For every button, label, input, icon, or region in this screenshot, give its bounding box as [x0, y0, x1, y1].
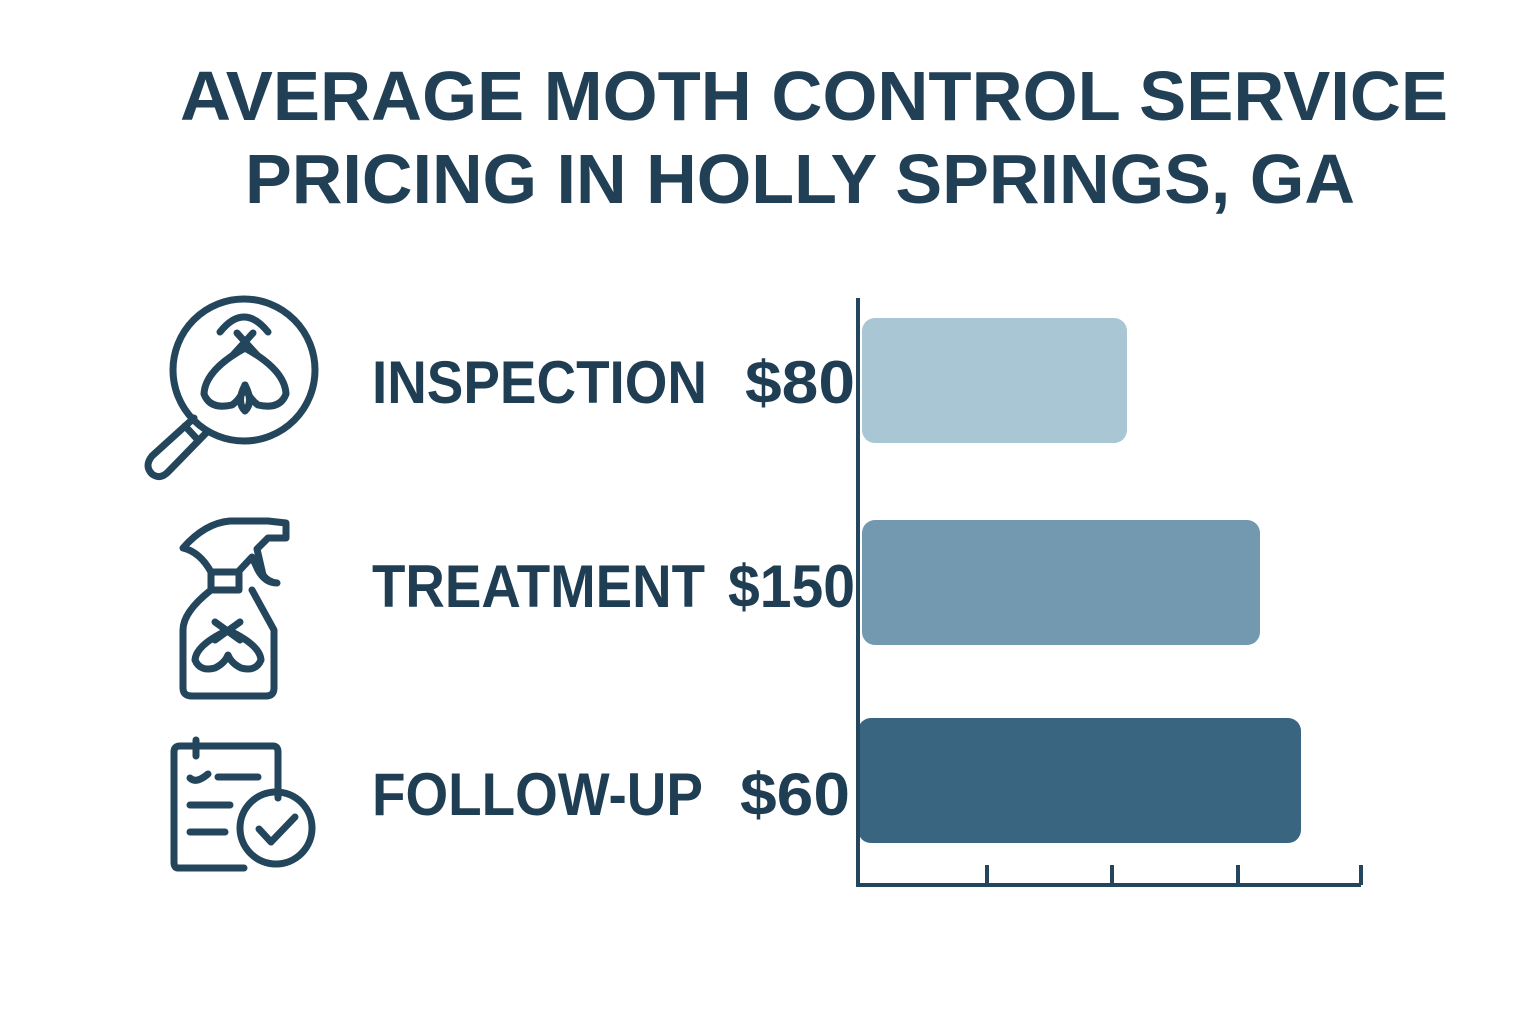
- labels: [372, 349, 855, 828]
- title: PRICING IN HOLLY SPRINGS, GA: [245, 140, 1355, 218]
- title: AVERAGE MOTH CONTROL SERVICE: [180, 57, 1448, 135]
- label: treatment: TREATMENT: [372, 553, 705, 620]
- label: inspection: $80: [745, 349, 855, 416]
- icon: magnifier with moth: [148, 299, 315, 477]
- label: follow-up: FOLLOW-UP: [372, 761, 703, 828]
- label: inspection: INSPECTION: [372, 349, 707, 416]
- label: treatment: $150: [728, 553, 855, 620]
- bar chart: [858, 298, 1361, 885]
- label: follow-up: $60: [740, 761, 850, 828]
- title: [180, 57, 1448, 218]
- icon: spray bottle with moth: [183, 521, 286, 696]
- icon: checklist with check: [174, 740, 312, 868]
